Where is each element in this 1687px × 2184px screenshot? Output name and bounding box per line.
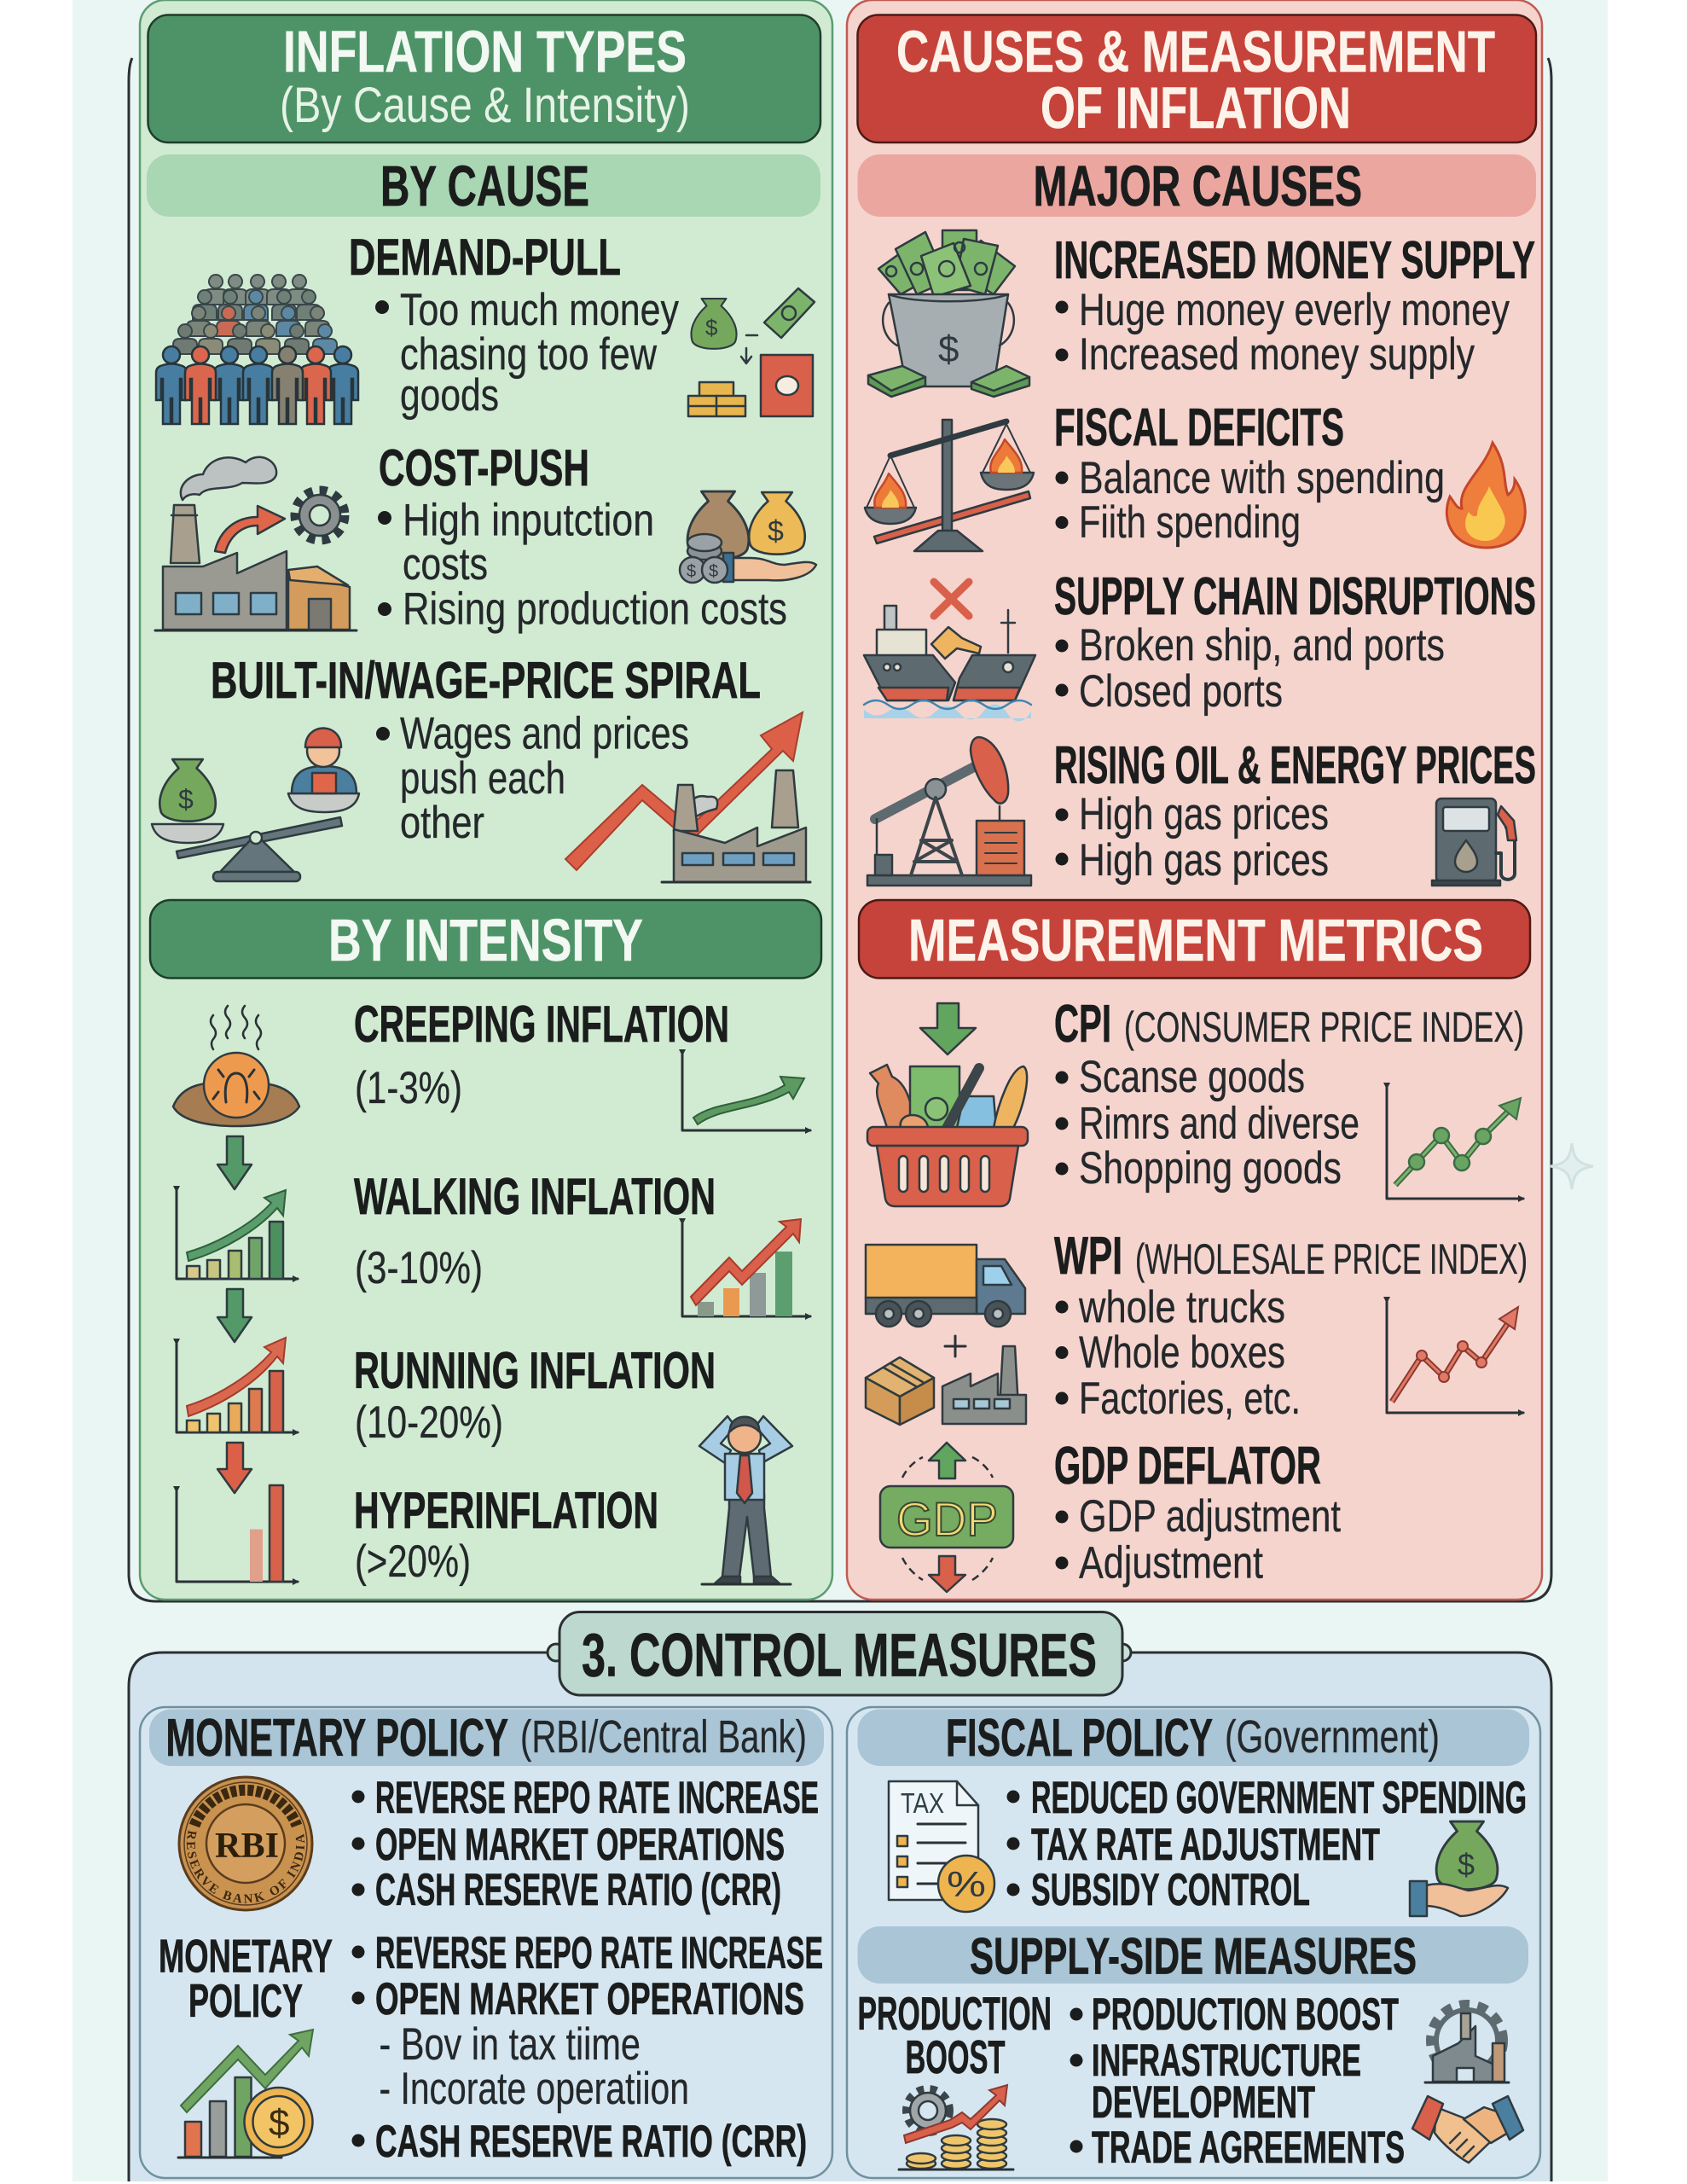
heading: inflation types — [148, 15, 820, 142]
panel: monetary policy — [138, 1706, 834, 2179]
text block: walking inflation: WALKING INFLATION — [354, 1168, 716, 1225]
label: production boost: BOOST — [906, 2030, 1005, 2083]
heading: causes and measurement: CAUSES & MEASUREMENT — [896, 19, 1495, 84]
chart: wpi line — [1387, 1302, 1523, 1413]
text block: wpi: Whole boxes — [1079, 1327, 1285, 1378]
text block: built-in wage-price spiral: push each — [400, 753, 565, 804]
heading: fiscal policy — [858, 1709, 1529, 1768]
text block: fiscal deficits: Balance with spending — [1079, 453, 1445, 503]
text block: built-in wage-price spiral: other — [400, 798, 484, 848]
text block: rising oil and energy prices — [1054, 736, 1536, 886]
list: monetary measures detail: - Bov in tax tiime — [379, 2019, 641, 2070]
text block: increased money supply: Huge money everly money — [1079, 285, 1510, 335]
title: control measures: 3. CONTROL MEASURES — [582, 1623, 1097, 1689]
text block: built-in wage-price spiral — [211, 652, 761, 848]
icon: gdp box: GDP — [896, 1492, 998, 1546]
list: fiscal measures: TAX RATE ADJUSTMENT — [1031, 1820, 1380, 1870]
subheading: by cause — [147, 154, 820, 218]
icon: money bags in hand — [680, 491, 816, 583]
icon: rising arrow with factory — [565, 712, 810, 882]
panel: fiscal policy and supply-side — [847, 1707, 1540, 2178]
icon: stressed man — [699, 1416, 792, 1584]
list: supply-side measures: INFRASTRUCTURE — [1092, 2036, 1361, 2086]
icon: broken ship — [864, 582, 1035, 722]
icon: tax document: % — [947, 1864, 986, 1904]
icon: wage-price balance: $ — [178, 784, 194, 815]
text block: wpi — [1054, 1227, 1528, 1424]
text block: creeping inflation — [354, 996, 729, 1113]
text block: cpi — [1054, 995, 1524, 1194]
list: monetary measures detail: REVERSE REPO RATE INCREASE — [375, 1928, 823, 1978]
text block: supply chain disruptions: Broken ship, and ports — [1079, 620, 1445, 671]
list: fiscal measures: SUBSIDY CONTROL — [1031, 1865, 1310, 1915]
text block: gdp deflator: GDP adjustment — [1079, 1491, 1341, 1542]
list: monetary measures detail: OPEN MARKET OPERATIONS — [375, 1974, 804, 2024]
heading: causes and measurement: OF INFLATION — [1041, 75, 1351, 141]
list: supply-side measures: PRODUCTION BOOST — [1092, 1989, 1399, 2040]
text block: demand-pull: chasing too few — [400, 329, 658, 380]
heading: measurement metrics — [859, 900, 1530, 978]
text block: hyperinflation: HYPERINFLATION — [354, 1482, 658, 1539]
subheading: major causes — [858, 154, 1536, 218]
panel: inflation types — [140, 0, 832, 1600]
icon: shopping basket — [867, 1065, 1028, 1206]
text block: cpi: CPI — [1054, 995, 1111, 1054]
list: monetary measures detail: - Incorate operatiion — [379, 2064, 689, 2114]
text block: gdp deflator: GDP DEFLATOR — [1054, 1437, 1321, 1496]
arrow: green down 2 — [217, 1289, 252, 1342]
text block: built-in wage-price spiral: Wages and prices — [400, 708, 689, 759]
heading: fiscal policy: (Government) — [1225, 1711, 1440, 1763]
text block: increased money supply — [1054, 231, 1535, 380]
text block: running inflation — [354, 1342, 716, 1448]
icon: tax document — [889, 1781, 994, 1912]
icon: rbi seal: RESERVE BANK OF INDIA — [186, 1830, 305, 1903]
text block: demand-pull — [349, 229, 679, 421]
icon: hand holding money bag: $ — [1458, 1847, 1475, 1882]
heading: inflation types: INFLATION TYPES — [283, 19, 687, 84]
text block: cpi: Scanse goods — [1079, 1052, 1305, 1102]
icon: gdp box — [880, 1443, 1013, 1592]
text block: walking inflation — [354, 1168, 716, 1293]
arrow: green down 1 — [217, 1136, 252, 1189]
heading: by intensity — [150, 900, 821, 978]
label: monetary policy: MONETARY — [159, 1930, 333, 1983]
subheading: supply-side measures: SUPPLY-SIDE MEASURES — [970, 1928, 1417, 1984]
subheading: by cause: BY CAUSE — [380, 154, 589, 218]
list: monetary measures detail — [351, 1928, 823, 2167]
list: supply-side measures — [1070, 1989, 1405, 2173]
text block: hyperinflation: (>20%) — [355, 1536, 471, 1587]
list: fiscal measures — [1006, 1773, 1527, 1915]
icon: factory with rising costs — [155, 457, 357, 630]
text block: cost-push: Rising production costs — [403, 584, 787, 635]
arrow: green down — [920, 1003, 976, 1054]
icon: oil pump — [867, 737, 1031, 886]
text block: gdp deflator: Adjustment — [1079, 1537, 1263, 1589]
icon: flame — [1446, 443, 1525, 548]
heading: by intensity: BY INTENSITY — [328, 907, 643, 973]
text block: fiscal deficits — [1054, 398, 1445, 548]
icon: balance with flames — [865, 420, 1034, 551]
list: monetary measures: OPEN MARKET OPERATIONS — [375, 1820, 785, 1870]
panel: control measures — [128, 1611, 1552, 2181]
text block: cpi: Rimrs and diverse — [1079, 1099, 1359, 1148]
list: monetary measures: REVERSE REPO RATE INCREASE — [375, 1773, 819, 1823]
icon: gear with factory — [1425, 2007, 1509, 2082]
heading: monetary policy: (RBI/Central Bank) — [520, 1711, 807, 1763]
text block: cpi: Shopping goods — [1079, 1143, 1342, 1194]
text block: demand-pull: Too much money — [400, 285, 679, 335]
icon: cardboard box — [866, 1357, 934, 1425]
text block: cpi: (CONSUMER PRICE INDEX) — [1124, 1003, 1524, 1051]
text block: increased money supply: Increased money supply — [1079, 329, 1475, 380]
text block: rising oil and energy prices: High gas prices — [1079, 789, 1329, 839]
icon: money bucket: $ — [938, 328, 959, 370]
icon: plus sign — [945, 1336, 965, 1356]
text block: demand-pull: goods — [400, 370, 499, 421]
text block: walking inflation: (3-10%) — [355, 1243, 483, 1293]
label: production boost — [858, 1987, 1052, 2083]
text block: cost-push: COST-PUSH — [379, 439, 589, 497]
icon: money bags in hand: $ — [709, 562, 718, 581]
star sparkle — [1551, 1143, 1593, 1189]
text block: demand-pull: DEMAND-PULL — [349, 229, 621, 286]
icon: tax document: TAX — [901, 1787, 944, 1819]
icon: wage-price balance — [152, 729, 359, 881]
icon: truck — [866, 1245, 1025, 1327]
icon: hand holding money bag — [1410, 1821, 1508, 1916]
icon: rbi seal: RBI — [215, 1827, 279, 1866]
text block: creeping inflation: CREEPING INFLATION — [354, 996, 729, 1053]
chart: hyperinflation bars — [177, 1485, 298, 1582]
text block: gdp deflator — [1054, 1437, 1341, 1589]
label: monetary policy: POLICY — [188, 1974, 303, 2027]
text block: wpi: WPI — [1054, 1227, 1122, 1286]
text block: wpi: whole trucks — [1078, 1282, 1285, 1333]
icon: rbi seal — [177, 1776, 314, 1911]
heading: inflation types: (By Cause & Intensity) — [280, 78, 690, 133]
icon: crowd — [156, 275, 358, 424]
label: production boost: PRODUCTION — [858, 1987, 1052, 2040]
list: supply-side measures: TRADE AGREEMENTS — [1092, 2123, 1405, 2173]
heading: measurement metrics: MEASUREMENT METRICS — [908, 907, 1483, 973]
text block: running inflation: (10-20%) — [355, 1397, 503, 1448]
chart: walking trend bars — [682, 1219, 810, 1316]
icon: money to goods — [688, 288, 815, 416]
list: supply-side measures: DEVELOPMENT — [1092, 2077, 1315, 2128]
text block: cost-push — [378, 439, 787, 635]
subheading: major causes: MAJOR CAUSES — [1034, 154, 1362, 218]
icon: money bags in hand: $ — [687, 562, 696, 581]
chart: creeping trend — [682, 1054, 810, 1130]
icon: growth chart with coin — [178, 2030, 313, 2158]
text block: hyperinflation — [354, 1482, 658, 1587]
text block: supply chain disruptions: Closed ports — [1079, 666, 1283, 717]
icon: gas pump — [1432, 799, 1516, 886]
text block: supply chain disruptions — [1054, 567, 1536, 717]
text block: wpi: Factories, etc. — [1079, 1374, 1301, 1424]
chart: walking bars — [177, 1190, 298, 1279]
text block: cost-push: High inputction — [403, 495, 654, 546]
text block: creeping inflation: (1-3%) — [355, 1063, 462, 1113]
heading: fiscal policy: FISCAL POLICY — [946, 1709, 1213, 1768]
icon: handshake — [1412, 2096, 1523, 2163]
text block: built-in wage-price spiral: BUILT-IN/WAGE-PRICE SPIRAL — [211, 652, 761, 709]
decorative frame — [129, 58, 1551, 1601]
icon: money to goods: $ — [705, 315, 718, 340]
label: monetary policy — [159, 1930, 333, 2027]
icon: gear arrow coins — [899, 2085, 1013, 2169]
icon: small factory — [942, 1346, 1026, 1424]
text block: cost-push: costs — [403, 539, 488, 590]
heading: causes and measurement — [858, 15, 1536, 142]
icon: money bucket — [868, 230, 1029, 397]
title: control measures — [548, 1612, 1131, 1695]
list: monetary measures — [351, 1773, 819, 1915]
text block: fiscal deficits: FISCAL DEFICITS — [1054, 398, 1344, 457]
list: monetary measures: CASH RESERVE RATIO (CRR) — [375, 1865, 781, 1915]
icon: creeping mound — [173, 1006, 299, 1126]
text block: fiscal deficits: Fiith spending — [1079, 497, 1301, 548]
chart: running bars — [177, 1338, 298, 1432]
heading: monetary policy: MONETARY POLICY — [165, 1709, 508, 1768]
panel: causes and measurement — [847, 0, 1542, 1600]
text block: rising oil and energy prices: High gas prices — [1079, 835, 1329, 886]
arrow: red down — [217, 1443, 252, 1493]
list: monetary measures detail: CASH RESERVE RATIO (CRR) — [375, 2117, 807, 2167]
text block: running inflation: RUNNING INFLATION — [354, 1342, 716, 1399]
chart: cpi line — [1387, 1088, 1523, 1199]
icon: growth chart with coin: $ — [269, 2102, 289, 2144]
icon: money bags in hand: $ — [768, 515, 784, 548]
